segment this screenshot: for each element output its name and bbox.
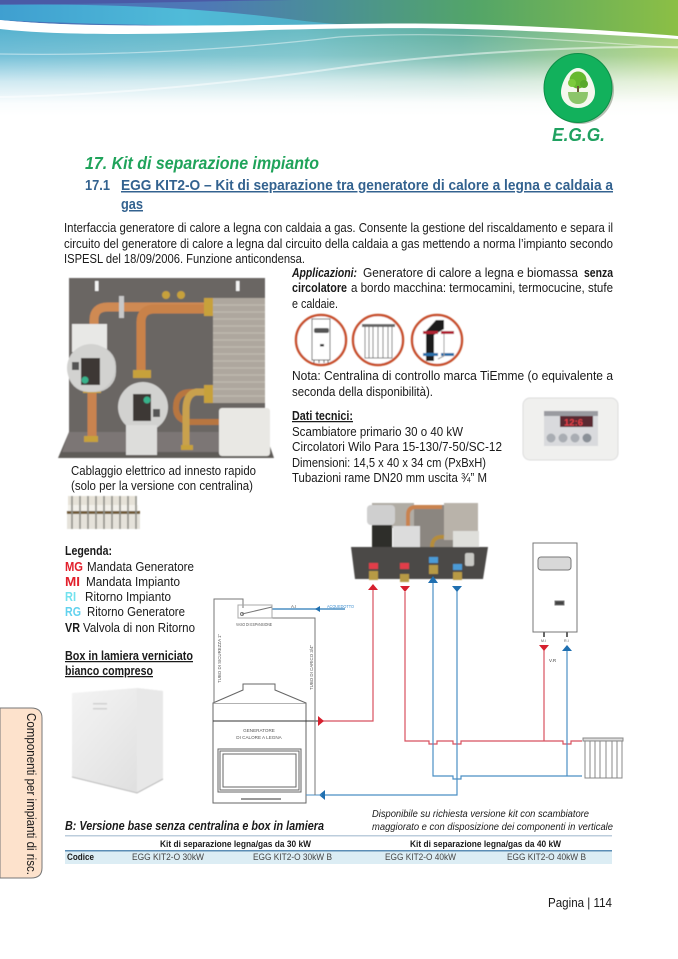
gas boiler [533,543,577,637]
back panel [69,278,265,438]
table rules [65,835,612,836]
technical data: Scambiatore primario 30 o 40 kW [292,425,463,439]
legend: VR [65,621,80,635]
applications text: a bordo macchina: termocamini, termocucine, stufe [351,281,613,295]
subtitle: EGG KIT2-O – Kit di separazione tra generatore di calore a legna e caldaia a [121,177,614,194]
table row: EGG KIT2-O 40kW [385,852,456,863]
blue flow lines [272,581,582,795]
box heading: bianco compreso [65,664,153,678]
technical data: Circolatori Wilo Para 15-130/7-50/SC-12 [292,440,502,454]
logo disc [546,56,614,124]
applications text: Generatore di calore a legna e biomassa [363,266,578,280]
page number: Pagina | 114 [548,896,612,910]
title: 17. Kit di separazione impianto [85,153,319,173]
clamp [119,296,124,318]
pipe labels: VASO DI ESPANSIONE [236,622,272,627]
technical data: Dimensioni: 14,5 x 40 x 34 cm (PxBxH) [292,456,486,470]
radiator [583,738,623,778]
kit top view [351,503,488,582]
subtitle [85,177,614,213]
table row: EGG KIT2-O 40kW B [507,852,586,863]
pipe labels: ACQUEDOTTO [327,604,355,609]
subtitle: gas [121,196,143,213]
bottom flange [58,432,274,458]
table header: Kit di separazione legna/gas da 30 kW [160,839,311,849]
pipe labels: A.I [291,604,296,609]
flow arrows [315,576,572,800]
table row: EGG KIT2-O 30kW B [253,852,332,863]
intro paragraph: circuito del generatore di calore a legna dal circuito della caldaia a gas mettendo a norma l’impianto secondo [64,237,613,251]
applications text: Applicazioni: [291,266,357,280]
pipe labels [217,604,355,690]
expansion vessel [238,605,272,618]
pipe labels: TUBO DI CARICO 3/4" [309,645,314,690]
availability note: maggiorato e con disposizione dei componenti in verticale [372,821,613,833]
table header: Kit di separazione legna/gas da 40 kW [410,839,561,849]
box heading: Box in lamiera verniciato [65,649,193,663]
legend: Legenda: [65,544,112,558]
applications text: circolatore [292,281,347,295]
boiler port labels [541,639,569,663]
wiring caption: (solo per la versione con centralina) [71,479,253,493]
logo wordmark: E.G.G. [552,124,605,145]
applications text: senza [584,266,614,280]
icon: fireplace flue [412,315,462,365]
legend: Mandata Impianto [86,575,180,589]
technical data: Tubazioni rame DN20 mm uscita ¾” M [292,471,487,485]
terminal strip photo [67,496,140,529]
subtitle: 17.1 [85,177,110,194]
safety and charge pipes [214,599,315,795]
egg with tree [561,68,595,108]
table row: Codice [67,852,94,863]
boiler port labels: V.R [549,658,557,663]
intro paragraph: Interfaccia generatore di calore a legna con caldaia a gas. Consente la gestione del riscaldamento e separa il [64,221,613,235]
junction box [219,408,270,456]
icon: boiler [296,315,346,365]
legend: RG [65,605,81,619]
version heading: B: Versione base senza centralina e box in lamiera [65,819,324,833]
table header [160,839,561,849]
pipe labels: TUBO DI SICUREZZA 1" [217,634,222,683]
product photo: kit [58,278,274,458]
generator label [236,728,283,740]
legend [65,544,195,635]
table row: EGG KIT2-O 30kW [132,852,204,863]
logo [544,54,614,145]
note [292,369,613,399]
legend: MG [65,560,83,574]
controller photo [523,398,618,460]
red flow lines [323,590,582,744]
boiler port labels: M.I [541,639,546,643]
boiler port labels: R.I [564,639,569,643]
legend: Valvola di non Ritorno [83,621,195,635]
applications text: e caldaie. [292,297,338,311]
icon: radiator [353,315,403,365]
note: Nota: Centralina di controllo marca TiEmme (o equivalente a [292,369,613,383]
legend: Mandata Generatore [87,560,194,574]
wood generator [213,684,322,803]
availability note: Disponibile su richiesta versione kit con scambiatore [372,808,589,820]
wiring caption [71,464,256,493]
intro paragraph [64,221,613,266]
table [65,835,612,864]
box heading [65,649,193,678]
legend: Ritorno Generatore [87,605,185,619]
availability note [372,808,613,833]
technical data: Dati tecnici: [292,409,353,423]
table row [67,852,586,863]
legend: RI [65,590,76,604]
legend: Ritorno Impianto [85,590,171,604]
controller photo: 12:6 [564,418,583,428]
legend: MI [65,575,80,589]
hydraulic diagram [213,503,623,803]
brass fittings [83,291,213,450]
generator label: DI CALORE A LEGNA [236,735,283,740]
heat exchanger [213,298,265,403]
left pump [67,324,116,392]
intro paragraph: ISPESL del 18/09/2006. Funzione anticondensa. [64,252,305,266]
header banner [0,0,678,116]
side tab [0,708,42,878]
box photo [72,688,163,793]
wiring caption: Cablaggio elettrico ad innesto rapido [71,464,256,478]
applications text [291,266,614,311]
right pump [118,382,168,455]
note: seconda della disponibilità). [292,385,433,399]
copper pipes [92,307,222,446]
generator label: GENERATORE [243,728,275,733]
logo ring [544,54,612,122]
technical data [292,409,502,485]
side tab: Componenti per impianti di risc. [24,713,38,875]
